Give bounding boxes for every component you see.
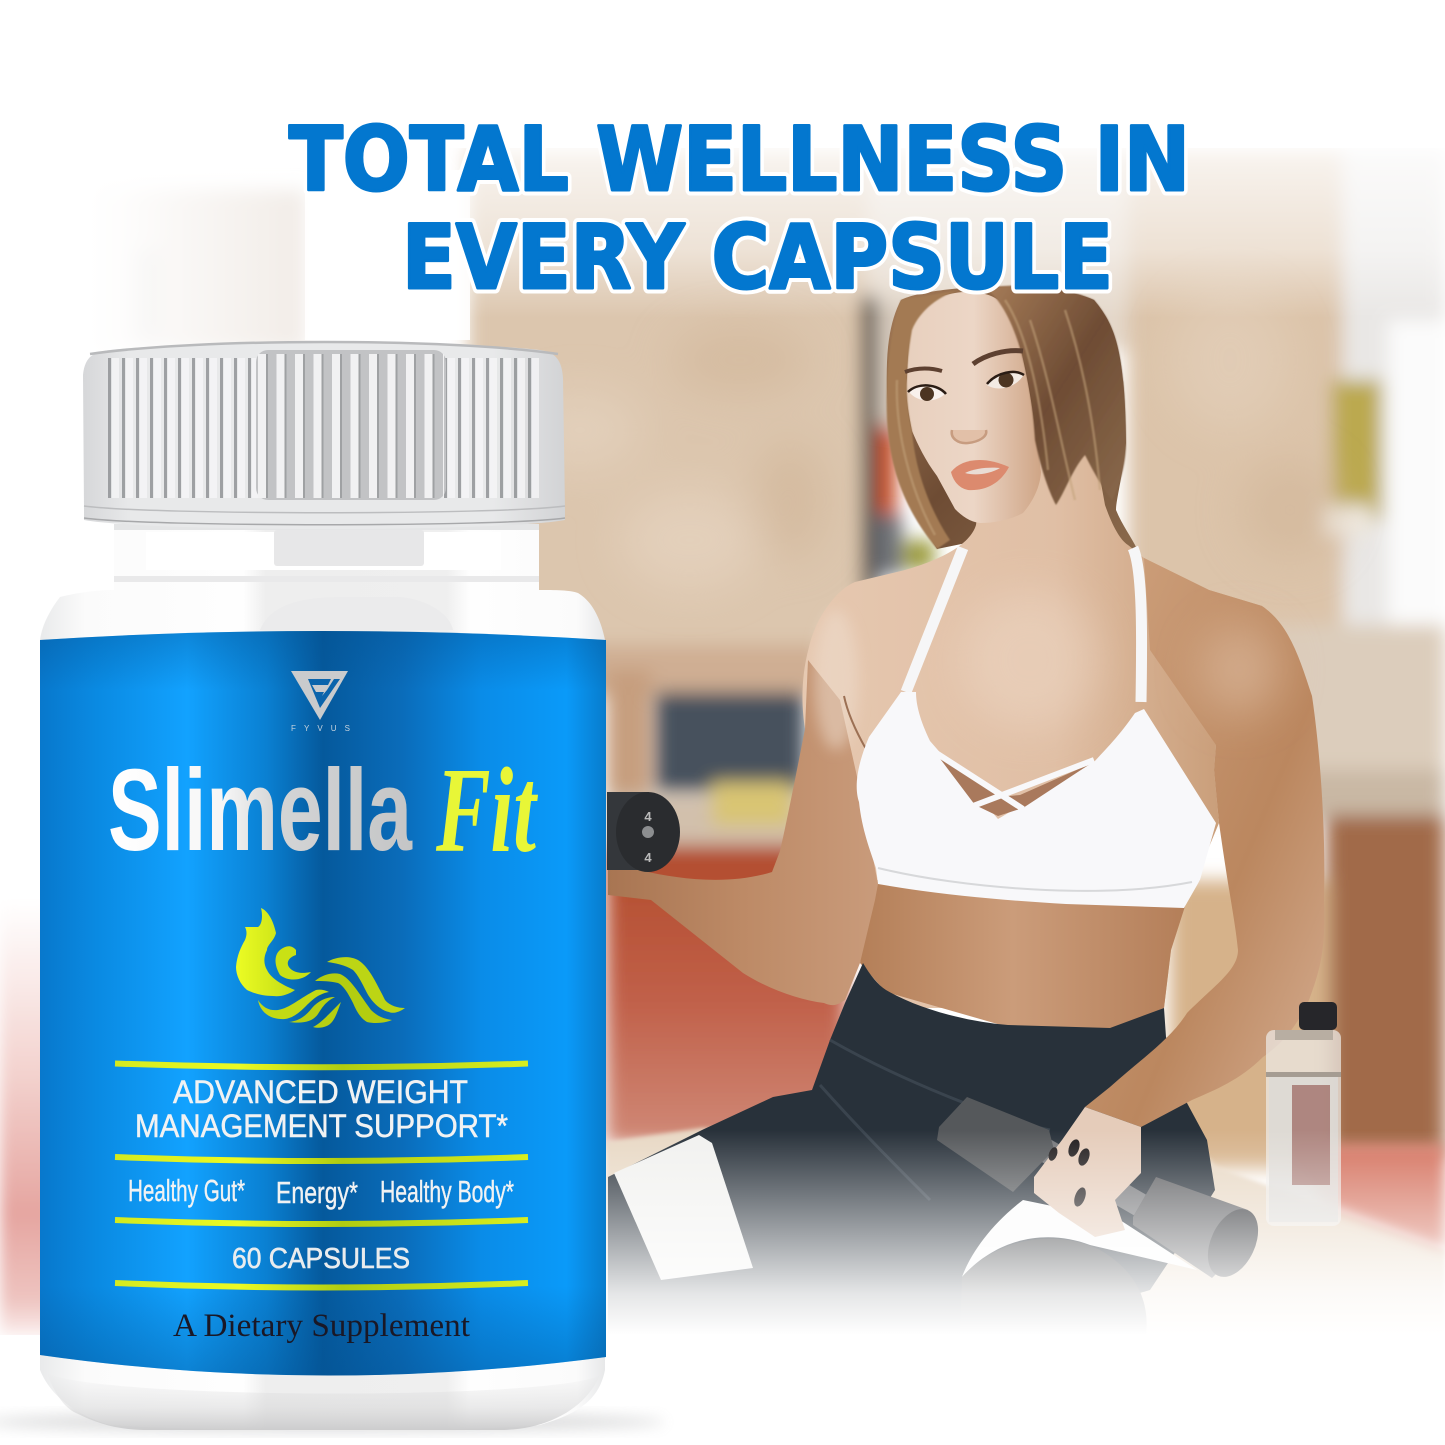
chest and shoulders <box>802 450 1262 1008</box>
nails <box>1047 1138 1092 1208</box>
torso <box>860 880 1200 1030</box>
hair front <box>985 286 1126 505</box>
dumbbell in raised hand <box>607 792 680 872</box>
yellow divider lines <box>115 1064 528 1288</box>
neck highlight <box>114 524 539 630</box>
title white outline: EVERY CAPSULE <box>402 206 1113 309</box>
lower hand <box>1034 1107 1141 1237</box>
bottle cap <box>83 342 565 529</box>
product name: Fit <box>435 743 538 878</box>
title blue lettering: EVERY CAPSULE <box>402 206 1113 309</box>
brand logo <box>291 671 350 733</box>
white knee band <box>614 1135 753 1280</box>
dumbbell in raised hand: 4 <box>644 850 652 865</box>
bottle body <box>40 525 605 1430</box>
tagline: MANAGEMENT SUPPORT* <box>135 1108 508 1144</box>
wall texture patches <box>564 312 1351 579</box>
hair highlights <box>897 300 1100 535</box>
cross straps <box>930 749 1094 809</box>
ground shadow <box>0 1412 665 1432</box>
face <box>906 292 1041 523</box>
bra hem <box>878 868 1192 891</box>
title blue lettering: TOTAL WELLNESS IN <box>289 108 1190 211</box>
chest highlight <box>960 590 1100 730</box>
brand logo: FYVUS <box>291 724 350 733</box>
tagline <box>135 1074 508 1144</box>
capsule count: 60 CAPSULES <box>232 1243 410 1275</box>
dumbbell in lower hand <box>937 1097 1268 1285</box>
product name: Slimella <box>108 745 413 875</box>
water bottle <box>1266 1002 1341 1226</box>
title <box>289 108 1190 309</box>
bra straps <box>906 548 1142 702</box>
tagline: ADVANCED WEIGHT <box>173 1074 468 1110</box>
bottom white fade <box>600 1130 1445 1335</box>
benefits: Healthy Body* <box>380 1174 514 1209</box>
left arm and forearm <box>608 660 878 1005</box>
title white outline: TOTAL WELLNESS IN <box>289 108 1190 211</box>
leggings <box>608 963 1215 1335</box>
armpit crease <box>844 696 866 749</box>
woman with dumbbells <box>600 286 1445 1335</box>
benefits: Healthy Gut* <box>128 1173 245 1208</box>
lips <box>951 460 1009 490</box>
benefits: Energy* <box>276 1175 358 1210</box>
red floor wedge <box>1338 1138 1445 1252</box>
neckline opening <box>935 752 1090 816</box>
title white outline <box>289 108 1190 309</box>
white sports bra <box>857 548 1216 908</box>
bottle base shading <box>47 1373 600 1430</box>
table top <box>606 1126 1445 1290</box>
title blue lettering <box>289 108 1190 309</box>
bra cups <box>857 692 1216 908</box>
far knee <box>960 1200 1197 1335</box>
dietary supplement note: A Dietary Supplement <box>173 1308 470 1344</box>
left shoulder highlight <box>814 610 858 750</box>
right shoulder highlight <box>1200 625 1280 715</box>
hair back <box>887 287 1137 549</box>
supplement bottle <box>0 342 665 1432</box>
hair left tress <box>887 290 960 549</box>
eyes and eyebrows <box>905 351 1024 401</box>
icon: phoenix <box>236 908 405 1028</box>
nose <box>952 430 986 443</box>
benefits <box>128 1173 514 1210</box>
dumbbell in raised hand: 4 <box>644 809 652 824</box>
legging folds <box>820 1040 1050 1200</box>
right arm <box>1085 558 1324 1127</box>
blue label <box>40 631 606 1376</box>
